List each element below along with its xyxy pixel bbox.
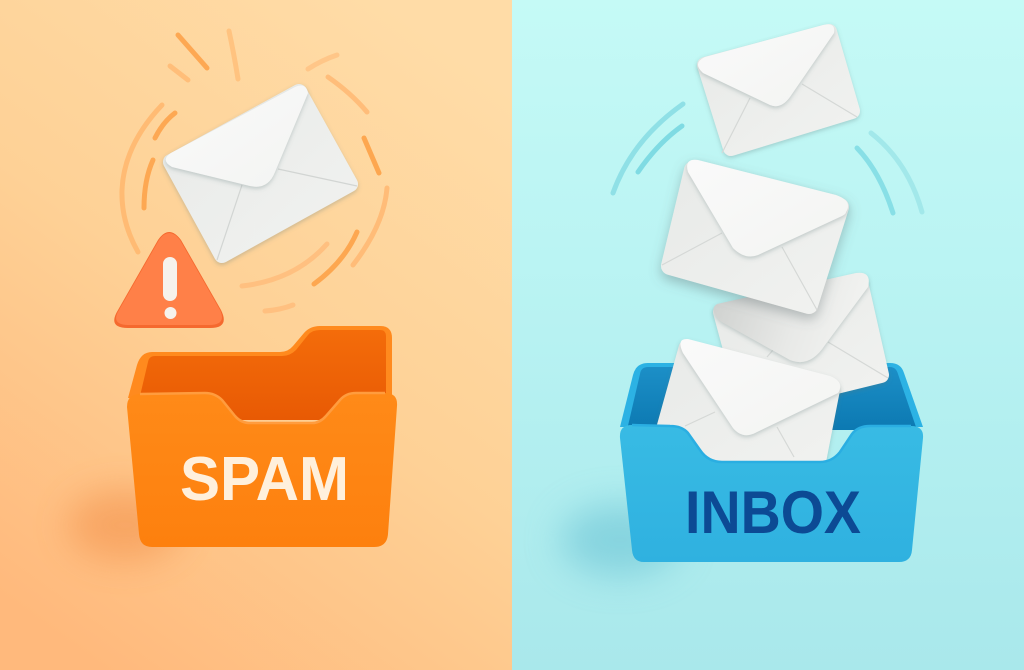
motion lines around inbox envelopes: [613, 104, 922, 213]
inbox folder shadow: [560, 504, 680, 576]
panel: inbox background: [512, 0, 1024, 670]
label: SPAM: SPAM: [180, 445, 349, 514]
icon: inbox envelope middle: [662, 160, 848, 310]
panel: spam background: [0, 0, 512, 670]
icon: spam envelope: [166, 85, 357, 260]
icon: inbox envelope rear: [713, 273, 888, 408]
inbox box front: [620, 425, 923, 562]
spam folder back: [128, 326, 392, 420]
spam folder shadow: [67, 489, 183, 561]
label: INBOX: INBOX: [685, 479, 861, 546]
motion lines around spam envelope: [122, 31, 387, 311]
icon: inbox envelope front: [648, 339, 840, 472]
spam folder front: [127, 393, 397, 547]
icon: inbox envelope top: [698, 24, 857, 153]
inbox box back: [620, 363, 923, 430]
spam folder: [127, 326, 397, 547]
icon: warning triangle: [114, 232, 224, 328]
exclamation mark: [163, 257, 177, 301]
